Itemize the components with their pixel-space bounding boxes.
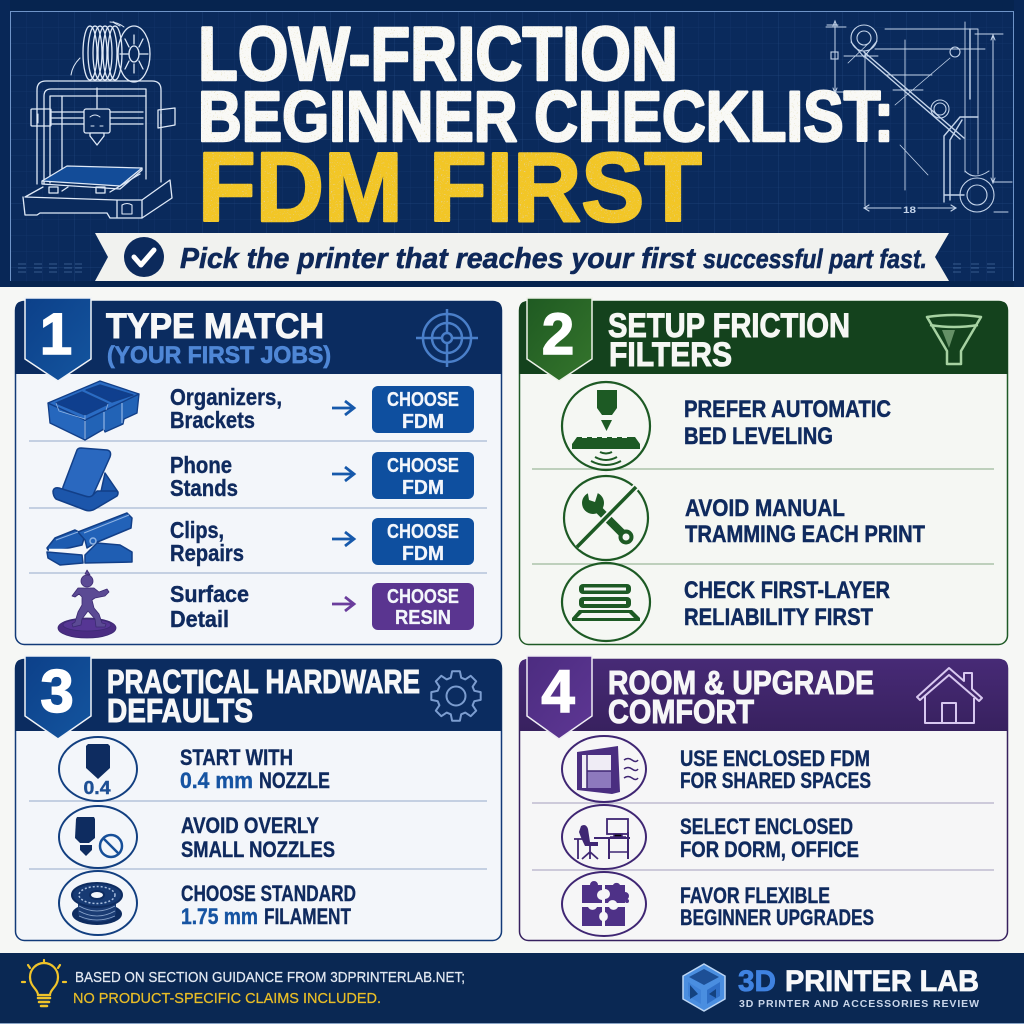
button: choose resin [372, 583, 474, 630]
item: prefer automatic bed leveling: PREFER AUTOMATIC [684, 396, 891, 423]
heading: COMFORT [608, 693, 754, 730]
header banner [0, 0, 1024, 287]
panel: practical hardware defaults [15, 656, 502, 940]
title: BEGINNER CHECKLIST: [198, 78, 894, 157]
item: choose standard 1.75 mm filament: FILAMENT [264, 904, 351, 929]
button: choose FDM [372, 386, 474, 433]
button: choose FDM: CHOOSE [387, 389, 459, 411]
icon: no manual tramming [564, 476, 648, 560]
item: avoid manual tramming [685, 495, 925, 548]
heading [107, 663, 420, 729]
arrows [332, 401, 354, 611]
item: avoid manual tramming: AVOID MANUAL [685, 495, 845, 522]
icon: organizer tray [48, 381, 139, 440]
item: avoid manual tramming: TRAMMING EACH PRINT [685, 521, 925, 548]
panel: type match [15, 298, 502, 644]
icon: target [416, 309, 478, 367]
item: choose standard 1.75 mm filament: 1.75 mm [181, 904, 258, 929]
item: start with 0.4 mm nozzle: 0.4 mm [180, 768, 253, 793]
icon: automatic bed leveling [562, 382, 650, 470]
heading: FILTERS [609, 336, 732, 374]
footnote: BASED ON SECTION GUIDANCE FROM 3DPRINTERLAB.NET; [75, 969, 465, 986]
row 3 text [170, 517, 244, 566]
button: choose FDM: FDM [402, 477, 444, 499]
item: use enclosed FDM: USE ENCLOSED FDM [680, 746, 870, 771]
subtitle ribbon: Pick the printer that reaches your first [180, 243, 696, 275]
row 4 text: Surface [170, 581, 249, 607]
row 4 text: Detail [170, 606, 229, 632]
item: favor flexible upgrades: FAVOR FLEXIBLE [680, 883, 830, 908]
item: prefer automatic bed leveling: BED LEVELING [684, 423, 833, 450]
badge: number 4 [527, 656, 592, 739]
heading: ROOM & UPGRADE [608, 664, 874, 701]
logo: 3D Printer Lab: PRINTER LAB [785, 965, 979, 998]
item: check first-layer reliability: RELIABILITY FIRST [684, 604, 873, 631]
item: use enclosed FDM: FOR SHARED SPACES [680, 768, 871, 793]
icon: house [917, 668, 982, 723]
row 1 text [170, 384, 282, 433]
icon: desk and chair [562, 805, 646, 869]
item: avoid overly small nozzles [181, 813, 335, 862]
badge: number 1: 1 [40, 302, 72, 367]
subtitle ribbon [95, 233, 949, 281]
row 2 text: Stands [170, 475, 238, 501]
icon: figurine [58, 570, 116, 638]
item: avoid overly small nozzles: AVOID OVERLY [181, 813, 319, 838]
item: start with 0.4 mm nozzle [180, 745, 330, 793]
icon: 3D printer line art [23, 22, 175, 218]
icon: first layer [562, 563, 650, 641]
icon: filament spool [59, 871, 137, 935]
icon: technical blueprint drawing: 18 [903, 205, 916, 216]
heading [608, 307, 850, 374]
footnote: NO PRODUCT-SPECIFIC CLAIMS INCLUDED. [73, 990, 381, 1007]
panel: setup friction filters [519, 298, 1008, 644]
badge: number 2 [527, 298, 592, 381]
row 3 text: Clips, [170, 517, 224, 543]
button: choose FDM: CHOOSE [387, 521, 459, 543]
heading: DEFAULTS [107, 692, 253, 729]
item: start with 0.4 mm nozzle: START WITH [180, 745, 293, 770]
badge: number 3 [25, 656, 91, 739]
icon: clip [47, 513, 132, 565]
row 3 text: Repairs [170, 540, 244, 566]
item: choose standard 1.75 mm filament [181, 881, 356, 929]
panel: room and upgrade comfort [519, 656, 1008, 940]
button: choose FDM: FDM [402, 543, 444, 565]
title [198, 12, 894, 242]
item: avoid overly small nozzles: SMALL NOZZLES [181, 837, 335, 862]
item: start with 0.4 mm nozzle: NOZZLE [259, 768, 330, 793]
button: choose resin: RESIN [395, 607, 451, 629]
button: choose FDM [372, 518, 474, 565]
title: FDM FIRST [198, 132, 702, 242]
icon: funnel [927, 315, 981, 364]
item: prefer automatic bed leveling [684, 396, 891, 450]
item: use enclosed FDM [680, 746, 871, 793]
badge: number 3: 3 [40, 658, 74, 725]
heading: (YOUR FIRST JOBS) [107, 342, 331, 369]
button: choose FDM: CHOOSE [387, 455, 459, 477]
icon: puzzle pieces [562, 872, 646, 936]
item: favor flexible upgrades: BEGINNER UPGRADES [680, 905, 874, 930]
row 2 text: Phone [170, 452, 232, 478]
icon: 0.4 nozzle [59, 737, 137, 801]
icon: gear [431, 671, 481, 721]
logo: 3D Printer Lab [683, 964, 979, 1011]
row 2 text [170, 452, 238, 501]
footnote [73, 969, 465, 1007]
icon: technical blueprint drawing [826, 21, 1012, 216]
heading: SETUP FRICTION [608, 307, 850, 345]
item: favor flexible upgrades [680, 883, 874, 930]
button: choose FDM [372, 452, 474, 499]
icon: light bulb [22, 960, 66, 1006]
item: select enclosed: FOR DORM, OFFICE [680, 837, 859, 862]
icon: 0.4 nozzle: 0.4 [84, 778, 110, 798]
heading: TYPE MATCH [106, 307, 324, 346]
heading [106, 307, 331, 369]
icon: phone stand [53, 448, 118, 511]
item: select enclosed: SELECT ENCLOSED [680, 814, 853, 839]
item: choose standard 1.75 mm filament: CHOOSE STANDARD [181, 881, 356, 906]
icon: enclosed printer [562, 736, 646, 802]
icon: small nozzle forbidden [59, 806, 137, 868]
item: check first-layer reliability: CHECK FIRST-LAYER [684, 577, 890, 604]
heading: PRACTICAL HARDWARE [107, 663, 420, 700]
footer bar [0, 953, 1024, 1024]
subtitle ribbon: successful part fast. [703, 244, 927, 274]
badge: number 1 [25, 298, 91, 381]
item: check first-layer reliability [684, 577, 890, 631]
badge: number 4: 4 [541, 658, 575, 725]
logo: 3D Printer Lab: 3D [738, 965, 776, 998]
logo: 3D Printer Lab: 3D PRINTER AND ACCESSORIES REVIEW [739, 998, 979, 1010]
row 4 text [170, 581, 249, 632]
button: choose resin: CHOOSE [387, 586, 459, 608]
heading [608, 664, 874, 730]
button: choose FDM: FDM [402, 411, 444, 433]
row 1 text: Brackets [170, 407, 255, 433]
row 1 text: Organizers, [170, 384, 282, 410]
item: select enclosed [680, 814, 859, 862]
title: LOW-FRICTION [198, 12, 678, 97]
badge: number 2: 2 [542, 302, 574, 367]
